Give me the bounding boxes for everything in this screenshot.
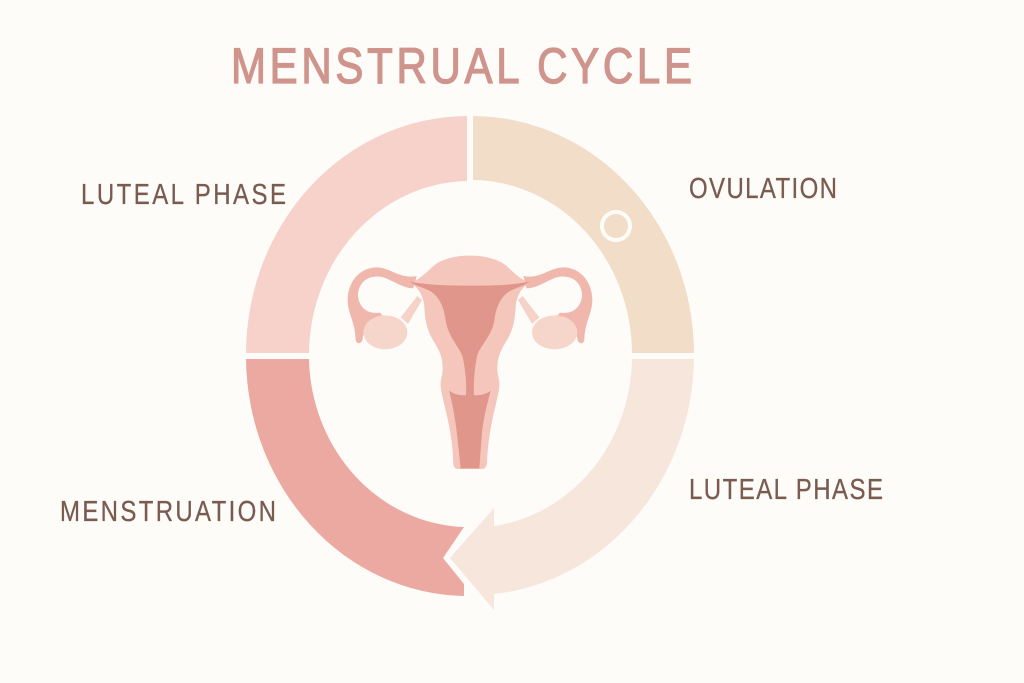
segment: luteal phase top left xyxy=(246,116,467,353)
icon: uterus illustration xyxy=(348,256,592,469)
right ligament xyxy=(518,296,539,324)
left ligament xyxy=(401,296,422,324)
title: MENSTRUAL CYCLE xyxy=(231,37,692,94)
left fallopian tube xyxy=(348,267,417,343)
label: luteal phase left: LUTEAL PHASE xyxy=(81,178,286,211)
label: luteal phase right: LUTEAL PHASE xyxy=(689,473,883,506)
uterine cavity and cervix xyxy=(410,282,529,468)
uterus body xyxy=(412,256,528,469)
segment: menstruation bottom left xyxy=(246,359,464,596)
right fallopian tube xyxy=(523,267,592,343)
arrow segment: luteal phase bottom right xyxy=(450,359,694,610)
label: ovulation: OVULATION xyxy=(689,172,837,205)
left ovary xyxy=(363,315,407,349)
label: menstruation: MENSTRUATION xyxy=(60,495,276,528)
right ovary xyxy=(532,315,577,349)
segment: ovulation top right xyxy=(473,116,694,353)
icon: ovulation ring xyxy=(602,212,630,240)
